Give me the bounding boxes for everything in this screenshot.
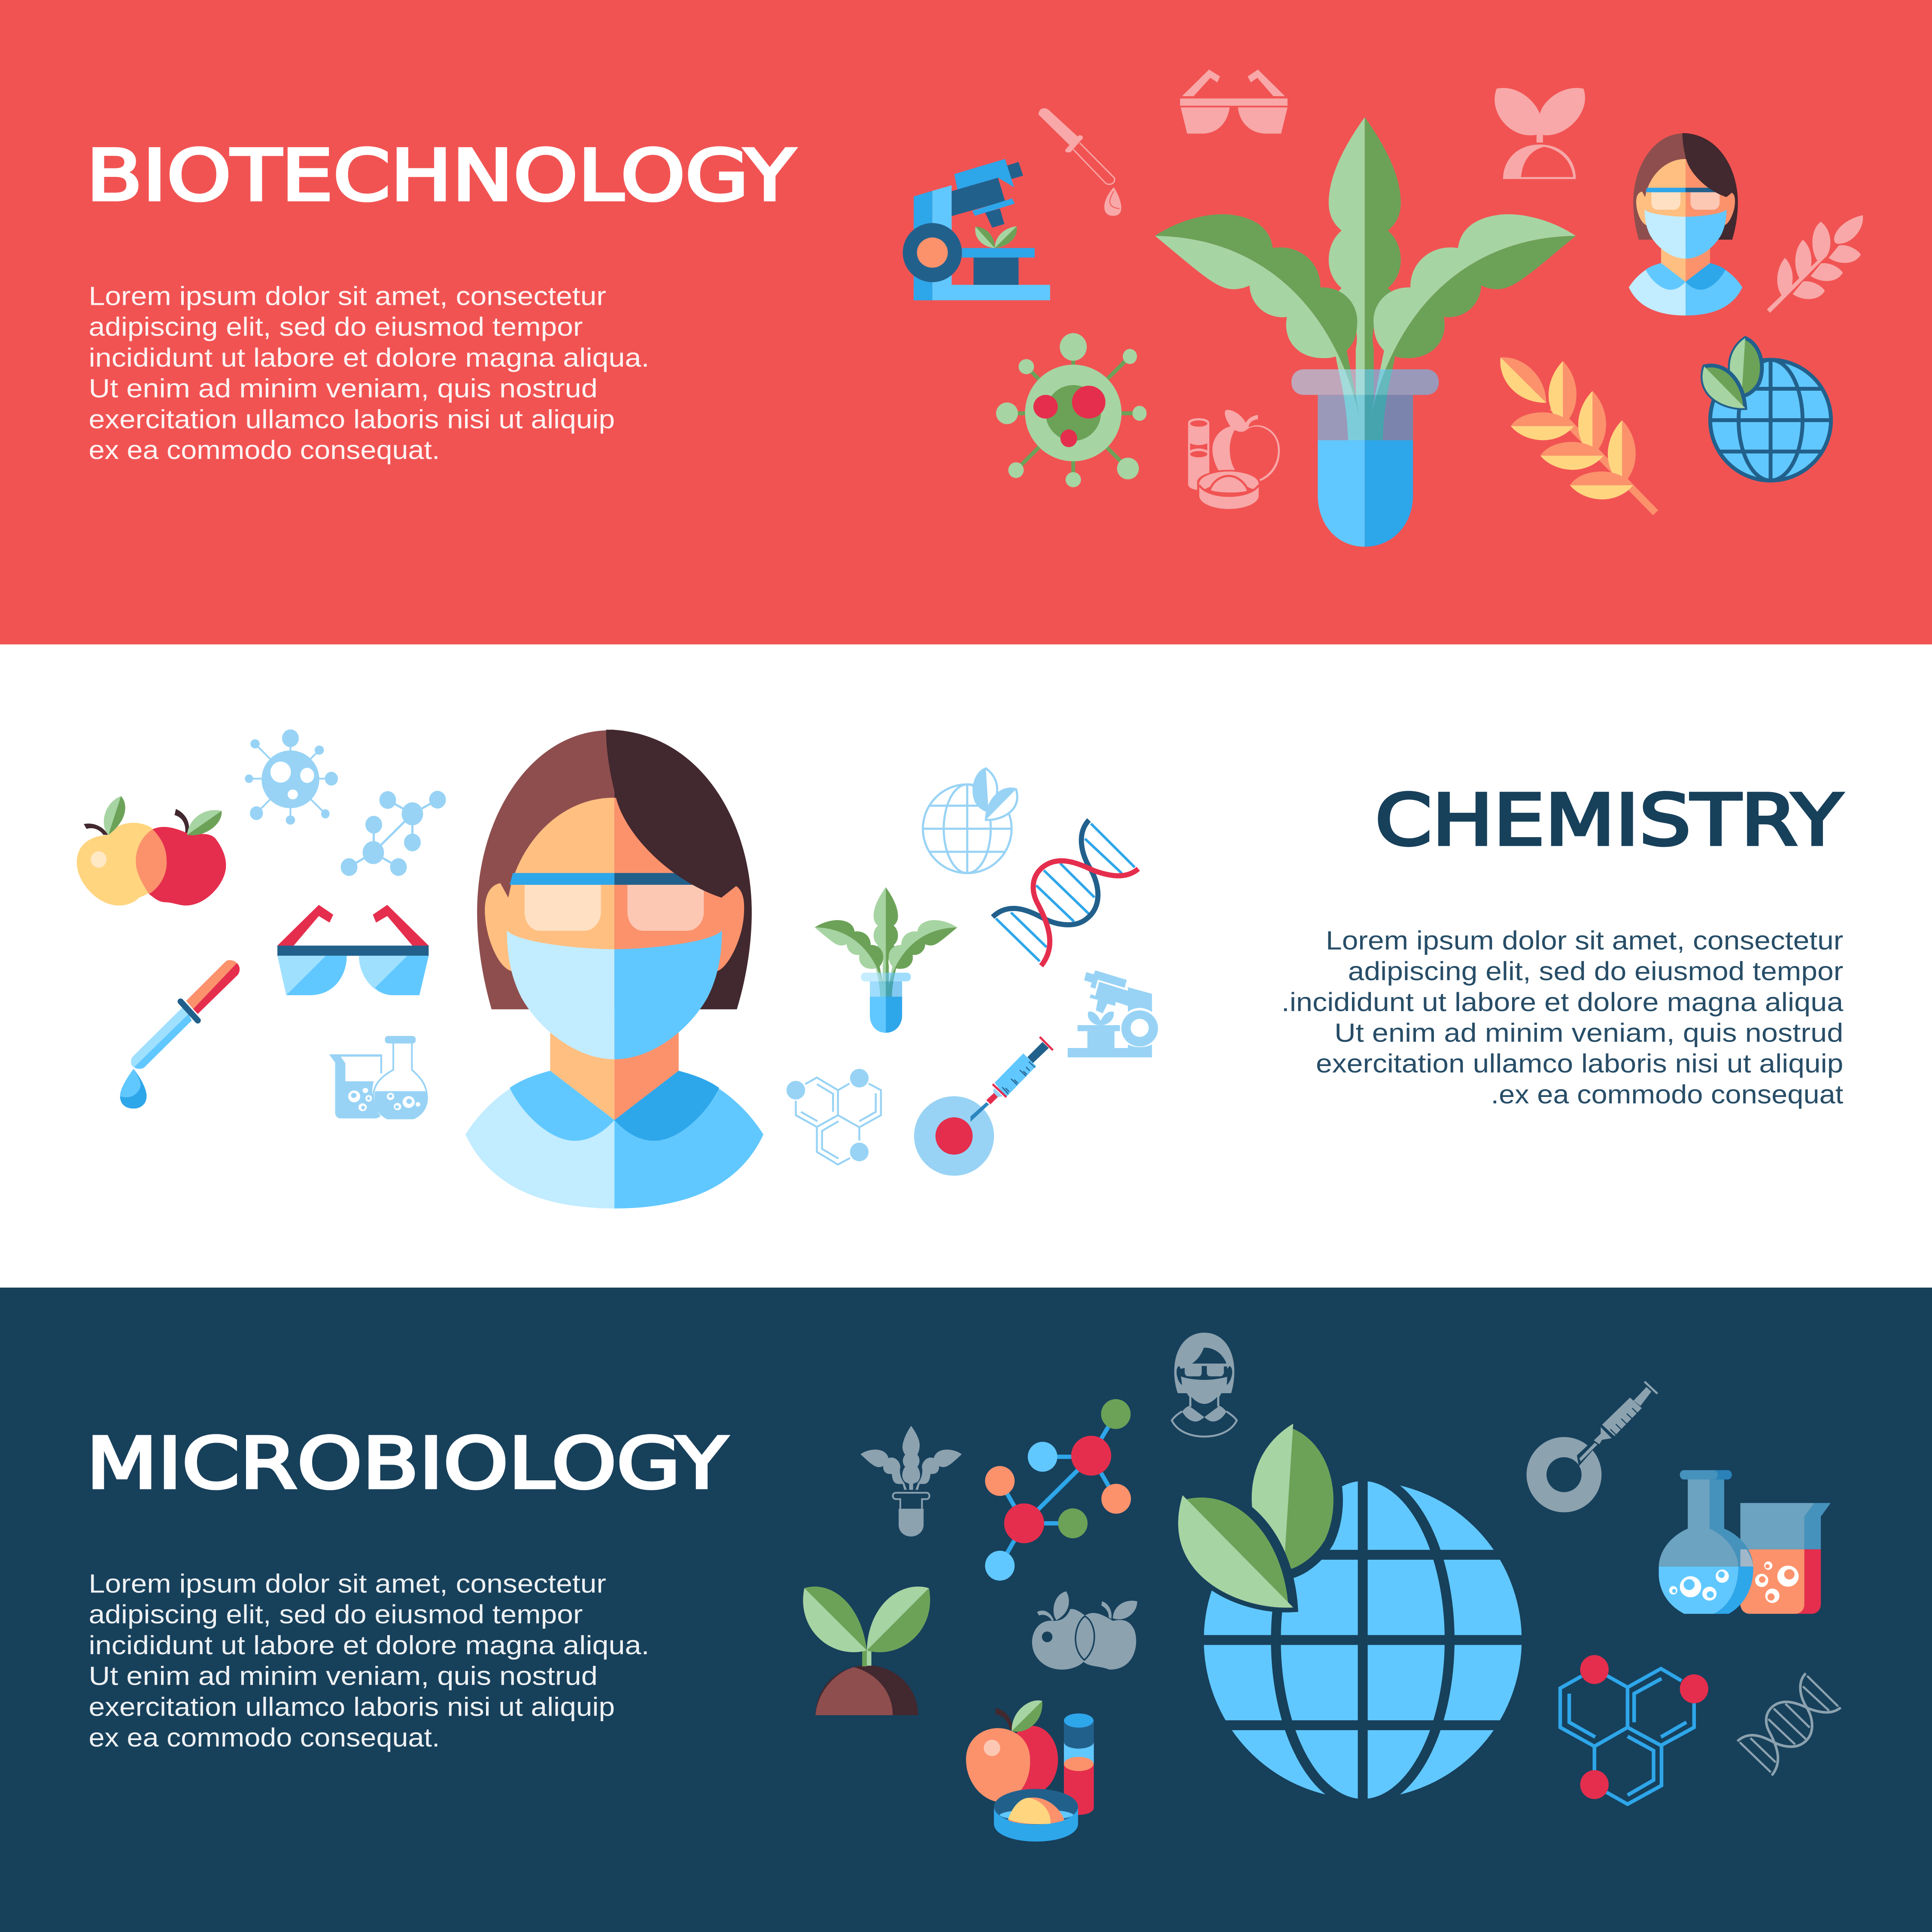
- text block: biotechnology description: [89, 281, 649, 465]
- icon: apple, tube and petri dish: [966, 1701, 1094, 1841]
- icon: globe outline with leaves: [923, 769, 1017, 873]
- icon: pink wheat sprig: [1767, 215, 1863, 313]
- illustration: plant in test tube: [1155, 117, 1576, 547]
- text block: microbiology description: [89, 1569, 649, 1752]
- text block: biotechnology description: Lorem ipsum dolor sit amet, consectetur: [89, 281, 606, 310]
- icon: pale microscope: [1068, 970, 1158, 1057]
- panel: microbiology: [0, 1288, 1932, 1932]
- icon: grey DNA helix: [1738, 1674, 1841, 1775]
- text block: chemistry description: .incididunt ut labore et dolore magna aliqua: [1282, 987, 1843, 1017]
- icon: two apples: [77, 796, 226, 905]
- icon: pale virus: [245, 729, 338, 825]
- icon: flask and beaker: [1659, 1470, 1831, 1614]
- text block: biotechnology description: ex ea commodo consequat.: [89, 435, 440, 465]
- icon: safety goggles: [277, 905, 428, 995]
- icon: scientist: [1629, 133, 1742, 316]
- icon: pink goggles: [1180, 70, 1288, 134]
- icon: globe with leaves: [1703, 338, 1831, 480]
- icon: small plant in test tube: [814, 887, 957, 1033]
- illustration: large scientist: [465, 730, 763, 1209]
- icon: pink sprout on soil: [1495, 88, 1585, 179]
- text block: biotechnology description: exercitation ullamco laboris nisi ut aliquip: [89, 404, 615, 434]
- text block: microbiology description: incididunt ut labore et dolore magna aliqua.: [89, 1631, 649, 1660]
- icon: pink apple, tube and petri dish: [1188, 410, 1280, 509]
- text block: chemistry description: Ut enim ad minim veniam, quis nostrud: [1334, 1018, 1843, 1047]
- icon: dropper with drop: [120, 960, 240, 1109]
- icon: syringe and grey ring: [1527, 1382, 1657, 1513]
- icon: microscope with seedling: [903, 159, 1050, 300]
- icon: syringe and cell: [914, 1037, 1053, 1176]
- icon: pale molecule: [341, 791, 446, 876]
- text block: chemistry description: [1282, 926, 1843, 1109]
- text block: biotechnology description: adipiscing elit, sed do eiusmod tempor: [89, 312, 583, 341]
- icon: sprout on soil: [803, 1586, 930, 1715]
- text block: biotechnology description: incididunt ut labore et dolore magna aliqua.: [89, 343, 649, 372]
- heading: chemistry: CHEMISTRY: [1375, 779, 1843, 861]
- text block: chemistry description: Lorem ipsum dolor sit amet, consectetur: [1326, 926, 1843, 955]
- illustration: large globe with leaves: [1178, 1424, 1527, 1804]
- text block: microbiology description: exercitation ullamco laboris nisi ut aliquip: [89, 1692, 615, 1721]
- icon: DNA helix: [993, 820, 1138, 966]
- icon: coloured molecule: [985, 1399, 1131, 1581]
- text block: chemistry description: exercitation ullamco laboris nisi ut aliquip: [1316, 1049, 1843, 1078]
- icon: grey plant in tube: [860, 1426, 962, 1537]
- panel: biotechnology: [0, 0, 1932, 644]
- icon: grey apples: [1032, 1591, 1137, 1670]
- icon: pale beaker and flask: [329, 1036, 427, 1118]
- text block: microbiology description: Lorem ipsum dolor sit amet, consectetur: [89, 1569, 606, 1598]
- text block: chemistry description: .ex ea commodo consequat: [1491, 1080, 1843, 1109]
- text block: biotechnology description: Ut enim ad minim veniam, quis nostrud: [89, 374, 598, 403]
- icon: grey scientist: [1172, 1333, 1237, 1437]
- panel: chemistry: [0, 644, 1932, 1288]
- heading: microbiology: MICROBIOLOGY: [86, 1422, 728, 1504]
- text block: microbiology description: Ut enim ad minim veniam, quis nostrud: [89, 1662, 598, 1691]
- text block: chemistry description: adipiscing elit, sed do eiusmod tempor: [1348, 957, 1843, 986]
- icon: orange wheat sprig: [1500, 357, 1658, 515]
- text block: microbiology description: ex ea commodo consequat.: [89, 1723, 440, 1752]
- icon: virus: [996, 333, 1147, 487]
- text block: microbiology description: adipiscing elit, sed do eiusmod tempor: [89, 1600, 583, 1629]
- icon: dropper: [1039, 108, 1121, 216]
- icon: hexagonal molecule: [1560, 1655, 1708, 1804]
- heading: biotechnology: BIOTECHNOLOGY: [86, 134, 795, 216]
- icon: pale hexagonal molecule: [787, 1069, 881, 1165]
